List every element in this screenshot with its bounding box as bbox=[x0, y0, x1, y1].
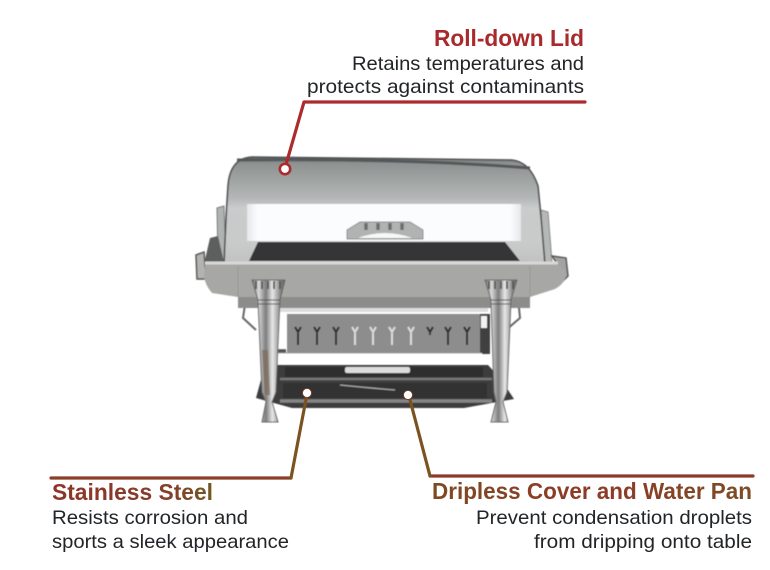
heading: roll-down lid: Roll-down Lid bbox=[434, 25, 584, 51]
water pan chamber bbox=[277, 313, 490, 362]
text: sports a sleek appearance: sports a sleek appearance bbox=[52, 531, 289, 553]
lid handle bbox=[347, 222, 423, 239]
chafing dish illustration bbox=[196, 157, 568, 422]
text: protects against contaminants: protects against contaminants bbox=[307, 76, 584, 98]
right leg bbox=[485, 280, 517, 422]
left side handle bbox=[196, 206, 226, 279]
base rim bbox=[204, 264, 566, 308]
marker: roll-down lid bbox=[280, 164, 290, 174]
leader line: roll-down lid bbox=[285, 102, 585, 168]
callout: dripless cover and water pan bbox=[403, 390, 753, 553]
right side handle bbox=[541, 210, 568, 284]
drip tray bbox=[256, 365, 514, 408]
text: retains temperatures: Retains temperatures and bbox=[352, 53, 584, 75]
marker: dripless cover bbox=[403, 390, 413, 400]
marker: stainless steel bbox=[302, 388, 312, 398]
upper light bar bbox=[280, 308, 488, 312]
leader line: dripless cover bbox=[430, 474, 753, 478]
leader line: stainless steel bbox=[51, 476, 291, 480]
lid highlight band bbox=[247, 204, 521, 241]
heading: dripless cover and water pan: Dripless Cover and Water Pan bbox=[432, 478, 752, 504]
roll-down lid dome bbox=[224, 157, 545, 265]
callout: stainless steel bbox=[51, 388, 312, 553]
left leg bbox=[252, 280, 285, 422]
callout: roll-down lid bbox=[280, 25, 585, 174]
light vent slots bbox=[352, 327, 414, 345]
dark vent slots bbox=[295, 327, 470, 345]
heading: stainless steel: Stainless Steel bbox=[52, 479, 213, 505]
back support wires bbox=[243, 298, 520, 330]
text: from dripping onto table: from dripping onto table bbox=[534, 531, 752, 553]
text: prevent condensation droplets: Prevent condensation droplets bbox=[476, 507, 752, 529]
text: resists corrosion: Resists corrosion and bbox=[52, 507, 248, 529]
dark lid reflection panel bbox=[249, 242, 520, 261]
